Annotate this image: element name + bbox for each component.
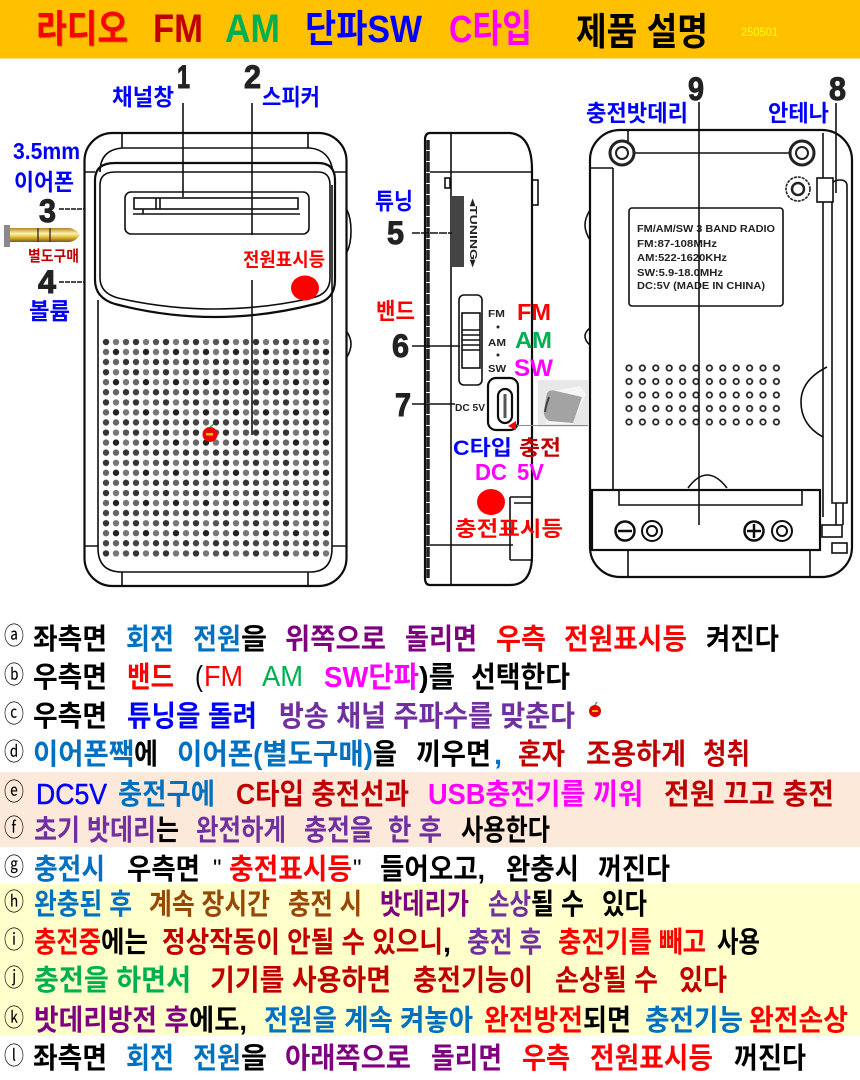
instruction j: 충전기능이 (413, 964, 533, 997)
instruction k: 전원을 계속 켜놓아 (264, 1004, 473, 1037)
instruction k: 완전방전 (484, 1004, 583, 1037)
band switch (459, 295, 507, 385)
instruction l: 아래쪽으로 (285, 1042, 411, 1075)
label: DC: DC (475, 459, 507, 485)
instruction i: , (443, 927, 451, 959)
number 6: 6 (392, 328, 409, 364)
front body outline (84, 133, 351, 586)
instruction k: 에도, (189, 1004, 247, 1037)
instruction g (4, 853, 670, 886)
instruction g: ⓖ (4, 853, 24, 881)
instruction e: 충전구에 (118, 778, 215, 811)
instruction i: 충전중 (34, 926, 101, 959)
label: 채널창: 채널창 (112, 84, 174, 110)
instruction l: 꺼진다 (734, 1042, 806, 1075)
instruction j: 기기를 사용하면 (210, 964, 391, 997)
icon: tomato (589, 702, 601, 717)
instruction c: 튜닝을 돌려 (127, 700, 257, 733)
number 3: 3 (39, 193, 56, 229)
band switch: AM (488, 338, 506, 349)
instruction j: 있다 (679, 964, 727, 997)
instruction k (4, 1004, 848, 1037)
instruction e: C타입 충전선과 (236, 778, 409, 811)
rating label plate: DC:5V (MADE IN CHINA) (637, 280, 765, 292)
instruction f: 한 후 (388, 814, 442, 847)
tuning wheel (451, 196, 464, 267)
instruction h: ⓗ (4, 888, 24, 916)
title: 라디오: 라디오 (36, 9, 128, 51)
instruction i: 사용 (717, 926, 760, 959)
instruction j: 손상될 수 (555, 964, 658, 997)
side body outline (425, 133, 538, 585)
instruction e: USB충전기를 끼워 (428, 778, 643, 811)
instruction l: 돌리면 (431, 1042, 502, 1075)
label: SW: SW (514, 355, 553, 382)
instruction l (4, 1042, 806, 1075)
instruction i: 정상작동이 안될 수 있으니 (162, 926, 443, 959)
instruction g: 완충시 (506, 853, 579, 886)
number 8: 8 (829, 71, 846, 107)
instruction d: 을 (373, 739, 397, 771)
icon: tomato marker (202, 424, 218, 442)
instruction j (4, 964, 727, 997)
instruction h: 있다 (602, 888, 647, 921)
band switch: FM (488, 309, 505, 320)
label: 이어폰: 이어폰 (14, 169, 74, 195)
background band: peach (0, 772, 860, 847)
instruction g: " (353, 855, 362, 882)
instruction a: 전원표시등 (564, 623, 687, 656)
label: 충전: 충전 (519, 437, 561, 460)
label: 별도구매: 별도구매 (28, 248, 79, 265)
instruction l: 회전 (126, 1042, 174, 1075)
header banner (0, 0, 860, 58)
instruction k: 충전기능 (645, 1004, 743, 1037)
instruction g: 우측면 (127, 853, 200, 886)
instruction j: ⓙ (4, 964, 24, 992)
title: AM: AM (225, 7, 280, 51)
instruction g: " (213, 855, 222, 882)
earphone jack line 3 (59, 208, 84, 210)
label: AM: AM (515, 327, 552, 353)
instruction j: 충전을 하면서 (34, 964, 191, 997)
instruction a: 돌리면 (405, 623, 477, 656)
rating label plate: SW:5.9-18.0MHz (637, 267, 723, 279)
instruction b: 우측면 (33, 661, 107, 694)
instruction d: ⓓ (4, 738, 24, 766)
instruction l: 전원 (193, 1042, 241, 1075)
band switch: SW (488, 364, 507, 375)
label: 스피커: 스피커 (262, 84, 320, 110)
instruction a: 위쪽으로 (285, 623, 386, 656)
instruction l: 우측 (522, 1042, 570, 1075)
title: FM: FM (153, 7, 203, 51)
rating label plate (629, 208, 783, 306)
volume line 4 (59, 281, 84, 283)
label: 3.5mm: 3.5mm (13, 138, 80, 164)
label: 볼륨: 볼륨 (29, 298, 70, 324)
instruction h: 밧데리가 (380, 888, 469, 921)
instruction i: 충전 후 (467, 926, 542, 959)
channel window (125, 192, 309, 234)
instruction f (4, 814, 550, 847)
instruction k: 밧데리방전 후 (34, 1004, 189, 1037)
icon: earphone plug (4, 225, 80, 247)
background band: pale yellow (0, 884, 860, 1036)
instruction d: 이어폰짹 (33, 738, 134, 771)
instruction l: 좌측면 (33, 1042, 107, 1075)
instruction d: 이어폰(별도구매) (177, 738, 373, 771)
number 4: 4 (38, 264, 56, 300)
icon: charging lamp (477, 489, 505, 515)
instruction a: 전원 (193, 623, 241, 656)
label: 안테나: 안테나 (768, 100, 829, 126)
instruction k: 되면 (583, 1004, 631, 1037)
instruction c (4, 700, 601, 733)
instruction k: 완전손상 (749, 1004, 848, 1037)
instruction c: 우측면 (33, 700, 107, 733)
instruction i (4, 926, 760, 959)
number 9: 9 (688, 71, 704, 107)
title: C타입: C타입 (449, 9, 532, 51)
front view of radio (4, 103, 351, 586)
line 5 (412, 232, 452, 234)
instruction d: , (494, 739, 502, 771)
version code: 250501 (741, 25, 778, 39)
rating label plate: FM/AM/SW 3 BAND RADIO (637, 223, 775, 235)
instruction d: 혼자 (518, 738, 565, 771)
tuning text: ◂TUNING▸ (467, 198, 478, 268)
USB-C charging port: DC 5V (455, 403, 485, 414)
instruction a: 좌측면 (33, 623, 107, 656)
instruction g: 꺼진다 (598, 853, 670, 886)
instruction a: 우측 (496, 623, 546, 656)
instruction e: ⓔ (4, 778, 24, 806)
line 7 (412, 403, 455, 405)
rating label plate: AM:522-1620KHz (637, 252, 727, 264)
instruction b: ⓑ (4, 661, 24, 689)
label: 충전표시등: 충전표시등 (455, 518, 563, 541)
instruction b: SW단파 (324, 661, 419, 694)
instruction h: 완충된 후 (34, 888, 132, 921)
antenna (817, 133, 847, 553)
instruction i: ⓘ (4, 926, 24, 954)
instruction b: 선택한다 (471, 661, 570, 694)
title: 제품 설명: 제품 설명 (576, 12, 708, 54)
line 6 (412, 345, 460, 347)
instruction b (4, 661, 570, 694)
instruction a (4, 622, 779, 656)
instruction f: 충전을 (304, 814, 373, 847)
instruction a: ⓐ (4, 622, 24, 650)
title: 단파SW: 단파SW (305, 9, 422, 51)
instruction i: 충전기를 빼고 (558, 926, 706, 959)
instruction l: 전원표시등 (590, 1042, 713, 1075)
instruction b: 밴드 (127, 661, 174, 694)
instruction f: 초기 밧데리 (34, 814, 156, 847)
label: 충전밧데리: 충전밧데리 (586, 100, 688, 126)
instruction h: 될 수 (531, 888, 584, 921)
instruction f: 사용한다 (461, 814, 550, 847)
rear speaker holes (622, 361, 783, 429)
arrow to charging port (508, 421, 588, 430)
instruction d: 조용하게 (586, 738, 686, 771)
rating label plate: FM:87-108MHz (637, 238, 717, 250)
instruction g: 충전표시등 (229, 853, 352, 886)
instruction f: 는 (156, 815, 179, 847)
USB-C charging port (455, 378, 518, 430)
side view of radio (412, 133, 588, 585)
number 2: 2 (244, 59, 261, 95)
instruction c: ⓒ (4, 700, 24, 728)
screws (610, 141, 814, 201)
instruction b: AM (262, 661, 303, 693)
instruction h: 충전 시 (288, 888, 362, 921)
rear body outline (585, 130, 852, 577)
instruction e: DC5V (36, 779, 108, 811)
line 9 (698, 102, 700, 525)
instruction d: 에 (134, 738, 158, 771)
instruction g: 들어오고, (380, 853, 485, 886)
instruction b: FM (204, 661, 243, 693)
callout line 2 (251, 103, 253, 435)
number 7: 7 (395, 387, 411, 423)
rear view of radio (585, 102, 852, 577)
number 5: 5 (387, 215, 404, 251)
label: 밴드: 밴드 (376, 298, 415, 324)
instruction b: ( (195, 661, 203, 693)
instruction d: 끼우면 (416, 738, 491, 771)
instruction a: 회전 (126, 623, 174, 656)
icon: power lamp (291, 276, 319, 300)
instruction e (4, 778, 834, 811)
instruction i: 에는 (101, 926, 148, 959)
instruction a: 켜진다 (706, 623, 779, 656)
USB-C connector photo (538, 380, 588, 427)
instruction f: 완전하게 (196, 814, 286, 847)
instruction b: )를 (419, 662, 455, 694)
line 8 (835, 103, 837, 193)
instruction k: ⓚ (4, 1004, 24, 1032)
instruction f: ⓕ (4, 814, 24, 842)
label: C타입: C타입 (453, 437, 512, 460)
instruction e: 전원 끄고 충전 (664, 778, 834, 811)
label: FM: FM (517, 299, 551, 325)
instruction l: ⓛ (4, 1042, 24, 1070)
instruction g: 충전시 (34, 853, 105, 886)
instruction d (4, 738, 750, 771)
instruction h: 계속 장시간 (149, 888, 270, 921)
label: 전원표시등: 전원표시등 (243, 249, 325, 271)
speaker grille (101, 337, 331, 559)
instruction c: 방송 채널 주파수를 맞춘다 (279, 700, 575, 733)
label: 튜닝: 튜닝 (375, 188, 413, 214)
instruction h: 손상 (488, 888, 531, 921)
number 1: 1 (177, 59, 190, 95)
instruction h (4, 888, 647, 921)
instruction l: 을 (241, 1043, 267, 1075)
battery door (592, 475, 820, 550)
instruction d: 청취 (703, 738, 750, 771)
label: 5V: 5V (517, 459, 545, 485)
callout line 1 (182, 103, 184, 197)
instruction a: 을 (241, 624, 267, 656)
